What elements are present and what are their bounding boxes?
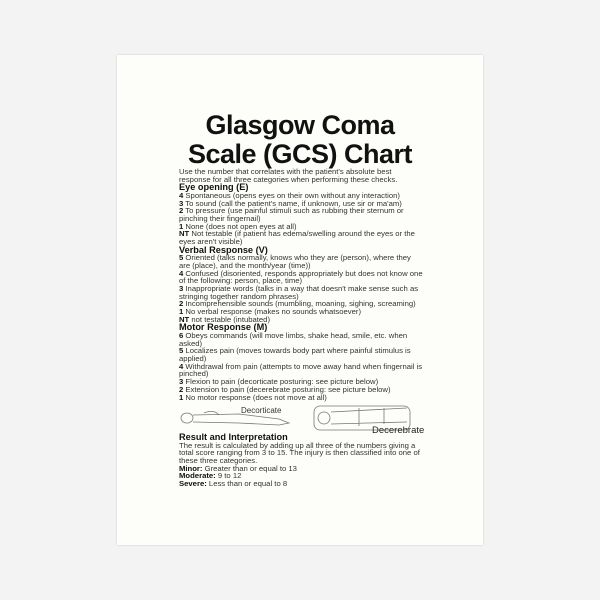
- text block: scale: stringing together random phrases): [179, 292, 299, 301]
- text block: scale: 3 To sound (call the patient's name, if unknown, use sir or ma'am): [179, 199, 402, 208]
- text block: scale: Eye opening (E): [179, 182, 248, 192]
- text block: scale: these three categories.: [179, 456, 257, 465]
- text block: scale: applied): [179, 354, 206, 363]
- text block: scale: eyes aren't visible) 5 Oriented (talks normally, knows who they are (person), where they: [179, 237, 411, 262]
- text block: scale: 4 Withdrawal from pain (attempts to move away hand when fingernail is: [179, 362, 422, 371]
- text block: scale: NT Not testable (if patient has edema/swelling around the eyes or the: [179, 229, 415, 238]
- text block: scale: 4 Confused (disoriented, responds appropriately but does not know one: [179, 269, 423, 278]
- text block: scale: 2 To pressure (use painful stimuli such as rubbing their sternum or: [179, 206, 404, 215]
- title: [188, 110, 412, 169]
- text block: scale: Result and Interpretation: [179, 432, 288, 442]
- figures: postures: [180, 406, 424, 435]
- text block: scale: 1 No motor response (does not move at all) The result is calculated by adding up all three of the numbers giving a: [179, 392, 415, 450]
- text block: scale: of the following: person, place, time): [179, 276, 302, 285]
- text block: scale: 3 Inappropriate words (talks in a way that doesn't make sense such as: [179, 284, 418, 293]
- text block: scale: Moderate: 9 to 12: [179, 471, 241, 480]
- text block: scale: 1 None (does not open eyes at all): [179, 222, 297, 231]
- text block: scale: Motor Response (M): [179, 322, 267, 332]
- text block: scale: total score ranging from 3 to 15. The injury is then classified into one of: [179, 448, 420, 457]
- decerebrate figure: [314, 406, 410, 430]
- title: Glasgow Coma: [205, 110, 395, 140]
- text block: scale: response for all three categories when performing these checks. 4 Spontaneous (opens eyes on their own without any interaction): [179, 175, 400, 200]
- text block: scale: 2 Incomprehensible sounds (mumbling, moaning, sighing, screaming): [179, 299, 416, 308]
- text block: scale: Severe: Less than or equal to 8: [179, 479, 287, 488]
- decorticate figure: [181, 412, 289, 425]
- text block: scale: asked): [179, 339, 202, 348]
- text block: scale: 1 No verbal response (makes no sounds whatsoever): [179, 307, 361, 316]
- text block: scale: Minor: Greater than or equal to 13: [179, 464, 297, 473]
- figures: postures: Decorticate: [241, 406, 282, 415]
- text block: scale: are (place), and the month/year (time)): [179, 261, 311, 270]
- text block: scale: [179, 167, 424, 488]
- text block: scale: Verbal Response (V): [179, 245, 268, 255]
- text block: scale: pinching their fingernail): [179, 214, 261, 223]
- text block: scale: pinched): [179, 369, 208, 378]
- text block: scale: NT not testable (intubated) 6 Obeys commands (will move limbs, shake head, smile, etc. when: [179, 315, 407, 340]
- paper: [117, 55, 483, 545]
- text block: scale: 3 Flexion to pain (decorticate posturing: see picture below): [179, 377, 378, 386]
- title: Scale (GCS) Chart: [188, 139, 412, 169]
- text block: scale: 5 Localizes pain (moves towards body part where painful stimulus is: [179, 346, 411, 355]
- text block: scale: Use the number that correlates with the patient's absolute best: [179, 167, 392, 176]
- text block: scale: 2 Extension to pain (decerebrate posturing: see picture below): [179, 385, 391, 394]
